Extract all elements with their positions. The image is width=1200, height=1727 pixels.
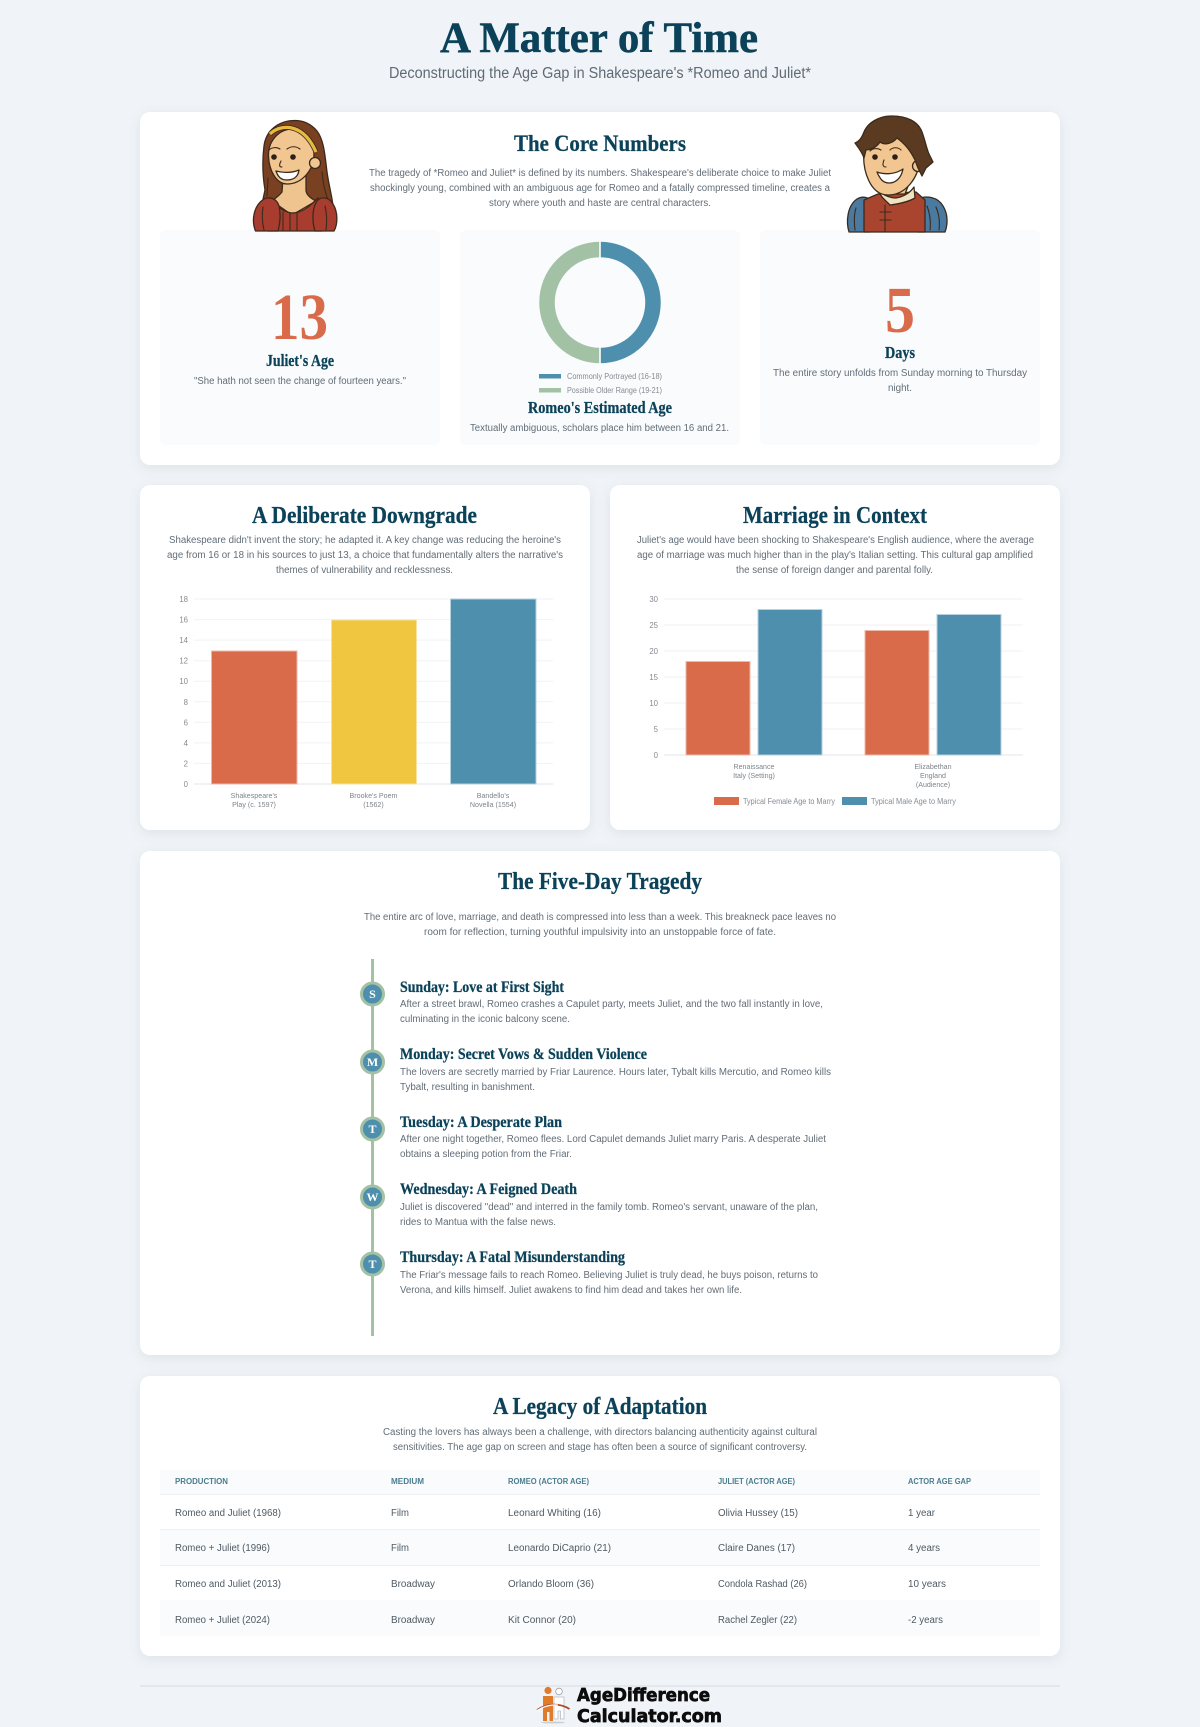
- event: Monday: The lovers are secretly married by Friar Laurence. Hours later, Tybalt kills Mercutio, and Romeo kills: [400, 1067, 831, 1078]
- bar chart: Juliet's age by source: 14: [179, 636, 189, 645]
- table row: 1968: 1 year: [908, 1508, 936, 1519]
- heading: A Legacy of Adaptation: [493, 1394, 707, 1420]
- event: Monday: [362, 1046, 831, 1093]
- bars: Elizabethan England: [865, 614, 1001, 755]
- grouped bar chart: marriage age: 0: [654, 751, 659, 760]
- stat card: days: [760, 230, 1040, 445]
- table row: 2024: Romeo + Juliet (2024): [175, 1615, 270, 1626]
- bar chart: Juliet's age by source: 12: [179, 657, 188, 666]
- chart legend: [714, 797, 956, 806]
- core numbers intro text: shockingly young, combined with an ambiguous age for Romeo and a fatally compressed timeline, creates a: [370, 183, 830, 194]
- core numbers intro text: The tragedy of *Romeo and Juliet* is defined by its numbers. Shakespeare's deliberate choice to make Juliet: [369, 168, 831, 179]
- stat card: Romeo's age: [460, 230, 740, 445]
- event: Sunday: culminating in the iconic balcony scene.: [400, 1014, 570, 1025]
- table row: 2013: Orlando Bloom (36): [508, 1579, 594, 1590]
- table row: 1996: Claire Danes (17): [718, 1543, 795, 1554]
- smile: [877, 169, 903, 183]
- event: Tuesday: T: [368, 1122, 377, 1136]
- stat number 13: 13: [271, 281, 328, 354]
- event: Sunday: [362, 979, 823, 1025]
- event: Sunday: S: [369, 987, 376, 1001]
- event: Tuesday: Tuesday: A Desperate Plan: [400, 1114, 562, 1131]
- table row: 1996: Film: [391, 1543, 409, 1554]
- table row: 2013: 10 years: [908, 1579, 946, 1590]
- stat label: Juliet's Age: [266, 351, 334, 370]
- event: Wednesday: Wednesday: A Feigned Death: [400, 1181, 577, 1198]
- heading: core numbers: The Core Numbers: [514, 131, 686, 156]
- doublet: [864, 192, 925, 232]
- table header: PRODUCTION: [175, 1477, 228, 1486]
- table row: 2024: Broadway: [391, 1615, 435, 1626]
- event: Monday: Monday: Secret Vows & Sudden Violence: [400, 1046, 647, 1063]
- table header: ROMEO (ACTOR AGE): [508, 1477, 589, 1486]
- table header: JULIET (ACTOR AGE): [718, 1477, 795, 1486]
- event: Sunday: Sunday: Love at First Sight: [400, 979, 565, 996]
- description text: [167, 535, 563, 576]
- axis labels: Play (c. 1597): [232, 801, 276, 809]
- event: Tuesday: [362, 1114, 826, 1160]
- neck: [882, 176, 912, 194]
- donut legend: [539, 372, 662, 395]
- hair: [262, 120, 333, 206]
- panel: a deliberate downgrade: [140, 485, 590, 830]
- stat number 5: 5: [885, 274, 915, 347]
- stat description: The entire story unfolds from Sunday morning to Thursday: [773, 368, 1027, 379]
- description text: room for reflection, turning youthful impulsivity into an unstoppable force of fate.: [424, 927, 776, 938]
- grouped bar chart: marriage age: 25: [649, 621, 659, 630]
- table row: 1996: Romeo + Juliet (1996): [175, 1543, 270, 1554]
- description text: age from 16 or 18 in his sources to just 13, a choice that fundamentally alters the narrative's: [167, 550, 563, 561]
- axis labels: Bandello's: [477, 792, 510, 800]
- stat label: Days: [885, 343, 915, 362]
- icon: Romeo character: [848, 116, 947, 232]
- logo wordmark: [577, 1686, 722, 1727]
- axis labels: [733, 763, 952, 789]
- grouped bar chart: marriage age: 10: [649, 699, 659, 708]
- donut legend: Possible Older Range (19-21): [567, 386, 662, 395]
- bar chart: Juliet's age by source: 8: [184, 698, 188, 707]
- table row: 2013: Romeo and Juliet (2013): [175, 1579, 281, 1590]
- bars: Renaissance Italy: [686, 610, 822, 755]
- grouped bar chart: marriage age: 30: [649, 595, 659, 604]
- icon: age difference people: [537, 1687, 570, 1724]
- ear: [310, 158, 320, 168]
- smile: [276, 170, 299, 180]
- table header: ACTOR AGE GAP: [908, 1477, 972, 1486]
- description text: themes of vulnerability and recklessness.: [276, 565, 453, 576]
- bar chart: Juliet's age by source: 2: [184, 759, 188, 768]
- face: [268, 129, 314, 184]
- event: Monday: M: [367, 1055, 378, 1069]
- description text: [383, 1427, 817, 1453]
- event: Wednesday: W: [366, 1190, 378, 1204]
- table row: 1996: [175, 1543, 940, 1554]
- bar chart: Juliet's age by source: [179, 595, 553, 809]
- face: [864, 128, 920, 195]
- title: A Matter of Time: [440, 15, 758, 62]
- bar chart: Juliet's age by source: 0: [184, 780, 189, 789]
- core numbers intro text: [369, 168, 831, 209]
- bodice: [268, 198, 322, 231]
- table row: 1968: Olivia Hussey (15): [718, 1508, 798, 1519]
- description text: sensitivities. The age gap on screen and stage has often been a source of significant controversy.: [393, 1442, 807, 1453]
- table header: MEDIUM: [391, 1477, 424, 1486]
- sleeves: [848, 197, 870, 232]
- axis labels: England: [920, 772, 946, 780]
- description text: Casting the lovers has always been a challenge, with directors balancing authenticity against cultural: [383, 1427, 817, 1438]
- event: Monday: Tybalt, resulting in banishment.: [400, 1082, 535, 1093]
- table row: 1996: 4 years: [908, 1543, 940, 1554]
- table row: 1968: Leonard Whiting (16): [508, 1508, 601, 1519]
- description text: Shakespeare didn't invent the story; he adapted it. A key change was reducing the heroine's: [169, 535, 561, 546]
- table row: 2013: Broadway: [391, 1579, 435, 1590]
- panel: marriage in context: [610, 485, 1060, 830]
- grouped bar chart: marriage age: [649, 595, 1023, 806]
- description text: the sense of foreign danger and parental folly.: [736, 565, 933, 576]
- description text: Juliet's age would have been shocking to Shakespeare's English audience, where the average: [637, 535, 1034, 546]
- panel: the five-day tragedy: [140, 851, 1060, 1355]
- table row: 1968: Romeo and Juliet (1968): [175, 1508, 281, 1519]
- logo wordmark: AgeDifference: [577, 1686, 710, 1706]
- eyes and brows: [271, 154, 277, 160]
- bar: Brooke 16: [332, 620, 416, 784]
- eyes and brows: [872, 154, 878, 160]
- panel: a legacy of adaptation: [140, 1376, 1060, 1656]
- event: Thursday: Thursday: A Fatal Misunderstanding: [400, 1249, 625, 1266]
- table row: 2013: Condola Rashad (26): [718, 1579, 807, 1590]
- description text: The entire arc of love, marriage, and death is compressed into less than a week. This breakneck pace leaves no: [364, 912, 836, 923]
- collar: [878, 187, 915, 205]
- event: Wednesday: rides to Mantua with the false news.: [400, 1217, 556, 1228]
- bar chart: Juliet's age by source: 4: [184, 739, 189, 748]
- event: Thursday: The Friar's message fails to reach Romeo. Believing Juliet is truly dead, he buys poison, returns to: [400, 1270, 818, 1281]
- stat label: Romeo's Estimated Age: [528, 398, 672, 417]
- heading: A Deliberate Downgrade: [252, 503, 477, 529]
- stat card: Juliet's age: [160, 230, 440, 445]
- axis labels: [231, 792, 516, 809]
- bar: Bandello 18: [450, 599, 536, 784]
- bar chart: Juliet's age by source: 10: [179, 677, 189, 686]
- table row: 2024: Rachel Zegler (22): [718, 1615, 797, 1626]
- event: Thursday: T: [368, 1257, 377, 1271]
- event: Wednesday: [362, 1181, 818, 1228]
- chart legend: Typical Female Age to Marry: [743, 797, 835, 806]
- donut legend: Commonly Portrayed (16-18): [567, 372, 662, 381]
- subtitle: Deconstructing the Age Gap in Shakespeare's *Romeo and Juliet*: [389, 65, 811, 82]
- stat quote: "She hath not seen the change of fourteen years.": [194, 376, 406, 387]
- axis labels: (Audience): [916, 781, 950, 789]
- bar chart: Juliet's age by source: 16: [179, 616, 188, 625]
- event: Sunday: After a street brawl, Romeo crashes a Capulet party, meets Juliet, and the two fall instantly in love,: [400, 999, 823, 1010]
- bar chart: Juliet's age by source: 6: [184, 718, 188, 727]
- footer logo: [537, 1686, 722, 1727]
- heading: The Five-Day Tragedy: [498, 869, 702, 895]
- event: Wednesday: Juliet is discovered "dead" and interred in the family tomb. Romeo's servant, unaware of the plan,: [400, 1202, 818, 1213]
- timeline: [362, 959, 831, 1336]
- table row: 1968: [175, 1508, 936, 1519]
- event: Thursday: Verona, and kills himself. Juliet awakens to find him dead and takes her own life.: [400, 1285, 742, 1296]
- table row: 2024: Kit Connor (20): [508, 1615, 576, 1626]
- stat description: [773, 368, 1027, 394]
- panel: core numbers: [140, 112, 1060, 465]
- stat description: Textually ambiguous, scholars place him between 16 and 21.: [470, 423, 729, 434]
- donut chart: [547, 242, 653, 364]
- stat description: night.: [888, 383, 912, 394]
- table row: 2024: [175, 1615, 943, 1626]
- grouped bar chart: marriage age: 5: [654, 725, 659, 734]
- table row: 1968: Film: [391, 1508, 409, 1519]
- table row: 2024: -2 years: [908, 1615, 943, 1626]
- puff sleeves: [253, 198, 280, 231]
- neck and chest: [272, 176, 316, 215]
- heading: Marriage in Context: [743, 503, 927, 529]
- table header: [175, 1477, 972, 1486]
- bar chart: Juliet's age by source: 18: [179, 595, 188, 604]
- ear: [912, 160, 924, 172]
- table row: 2013: [175, 1579, 946, 1590]
- axis labels: Elizabethan: [914, 763, 952, 771]
- chart legend: Typical Male Age to Marry: [871, 797, 956, 806]
- logo wordmark: Calculator.com: [577, 1707, 722, 1727]
- axis labels: Renaissance: [733, 763, 775, 771]
- hair: [855, 116, 933, 176]
- axis labels: Brooke's Poem: [350, 792, 398, 800]
- axis labels: (1562): [363, 801, 384, 809]
- event: Tuesday: obtains a sleeping potion from the Friar.: [400, 1149, 572, 1160]
- axis labels: Novella (1554): [470, 801, 516, 809]
- event: Tuesday: After one night together, Romeo flees. Lord Capulet demands Juliet marry Paris. A desperate Juliet: [400, 1134, 826, 1145]
- header: [389, 15, 811, 82]
- description text: age of marriage was much higher than in the play's Italian setting. This cultural gap amplified: [637, 550, 1033, 561]
- icon: Juliet character: [253, 120, 337, 231]
- adaptations table: [160, 1470, 1040, 1636]
- event: Thursday: [362, 1249, 818, 1296]
- headband: [270, 127, 316, 152]
- table row: 1996: Leonardo DiCaprio (21): [508, 1543, 611, 1554]
- grouped bar chart: marriage age: 20: [649, 647, 659, 656]
- description text: [637, 535, 1034, 576]
- bar: Shakespeare 13: [212, 651, 297, 784]
- grouped bar chart: marriage age: 15: [649, 673, 659, 682]
- core numbers intro text: story where youth and haste are central characters.: [489, 198, 711, 209]
- axis labels: Italy (Setting): [733, 772, 775, 780]
- description text: [364, 912, 836, 938]
- axis labels: Shakespeare's: [231, 792, 278, 800]
